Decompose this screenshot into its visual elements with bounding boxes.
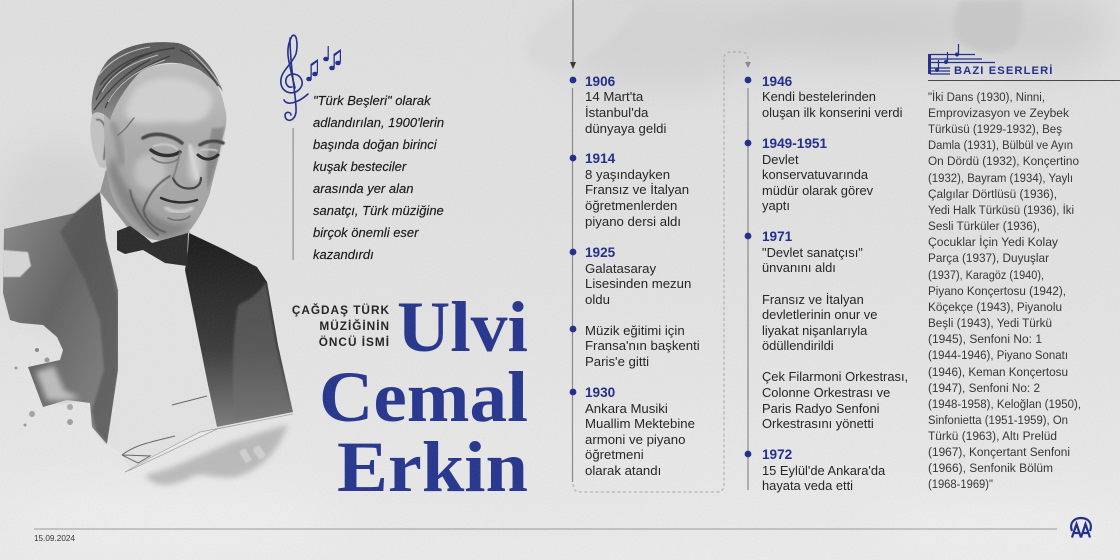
timeline connectors [570, 0, 751, 492]
timeline column 2: müdür olarak görev [762, 183, 874, 198]
timeline column 1: Müzik eğitimi için [585, 323, 685, 338]
timeline column 2: Çek Filarmoni Orkestrası, [762, 369, 908, 384]
timeline column 2: 15 Eylül'de Ankara'da [762, 463, 886, 478]
works list: (1937), Karagöz (1940), [928, 268, 1044, 282]
intro text: başında doğan birinci [313, 137, 438, 152]
intro text: birçok önemli eser [313, 225, 419, 240]
timeline column 1: öğretmeni [585, 447, 644, 462]
timeline column 1: Ankara Musiki [585, 401, 668, 416]
timeline column 1: dünyaya geldi [585, 121, 666, 136]
timeline column 2: 1949-1951 [762, 136, 827, 151]
title: Ulvi [397, 287, 528, 367]
timeline column 2 [745, 74, 908, 493]
timeline column 2: yaptı [762, 198, 790, 213]
timeline column 2: Fransız ve İtalyan [762, 292, 864, 307]
subtitle [292, 303, 390, 349]
timeline column 1: oldu [585, 292, 610, 307]
intro text: "Türk Beşleri" olarak [313, 93, 432, 108]
works list: (1967), Konçertant Senfoni [928, 445, 1070, 459]
right coat [185, 233, 293, 427]
face [104, 64, 226, 240]
timeline column 1: Fransız ve İtalyan [585, 182, 689, 197]
shirt front [100, 192, 217, 468]
works list: (1944-1946), Piyano Sonatı [928, 348, 1068, 362]
portrait: Ulvi Cemal Erkin [3, 42, 293, 485]
icon: music notes [306, 46, 341, 81]
works list: Yedi Halk Türküsü (1936), İki [928, 203, 1074, 217]
timeline column 1: öğretmenlerden [585, 198, 677, 213]
date: 15.09.2024 [34, 534, 75, 543]
works list [928, 80, 1120, 491]
timeline column 2: 1972 [762, 447, 793, 462]
timeline column 2: Orkestrasını yönetti [762, 416, 874, 431]
timeline column 2: 1971 [762, 229, 793, 244]
intro text: adlandırılan, 1900'lerin [313, 115, 444, 130]
timeline column 2: hayata veda etti [762, 478, 853, 493]
works list: (1946), Keman Konçertosu [928, 365, 1068, 379]
timeline column 1: Galatasaray [585, 261, 657, 276]
works list: (1945), Senfoni No: 1 [928, 332, 1042, 346]
subtitle: ÇAĞDAŞ TÜRK [292, 303, 390, 317]
title [319, 287, 528, 507]
timeline column 1: piyano dersi aldı [585, 214, 681, 229]
timeline column 1: armoni ve piyano [585, 432, 685, 447]
works list: Çocuklar İçin Yedi Kolay [928, 235, 1059, 249]
timeline column 2: konservatuvarında [762, 167, 869, 182]
timeline column 2: Devlet [762, 152, 799, 167]
works list: Beşli (1943), Yedi Türkü [928, 316, 1052, 330]
neck [100, 170, 190, 245]
works list: Sinfonietta (1951-1959), On [928, 413, 1068, 427]
footer line [34, 528, 1057, 530]
timeline column 1: 1930 [585, 385, 615, 400]
timeline column 2: liyakat nişanlarıyla [762, 323, 868, 338]
timeline column 2: Paris Radyo Senfoni [762, 401, 880, 416]
subtitle: ÖNCÜ İSMİ [319, 335, 390, 349]
timeline column 2: 1946 [762, 74, 793, 89]
timeline column 1: Lisesinden mezun [585, 276, 691, 291]
intro text: sanatçı, Türk müziğine [313, 203, 444, 218]
works list: (1947), Senfoni No: 2 [928, 381, 1040, 395]
timeline column 1: Muallim Mektebine [585, 416, 695, 431]
works list: Sesli Türküler (1936), [928, 219, 1040, 233]
intro text: kuşak besteciler [313, 159, 407, 174]
works list: (1948-1958), Keloğlan (1950), [928, 397, 1081, 411]
timeline column 1: İstanbul'da [585, 105, 649, 120]
works list: Damla (1931), Bülbül ve Ayın [928, 138, 1073, 152]
timeline column 2: ünvanını aldı [762, 260, 836, 275]
intro text [292, 93, 444, 262]
works list: Piyano Konçertosu (1942), [928, 284, 1066, 298]
works list: (1968-1969)" [928, 477, 993, 491]
works list: Köçekçe (1943), Piyanolu [928, 300, 1062, 314]
intro text: arasında yer alan [313, 181, 413, 196]
logo: AA [1071, 518, 1091, 538]
timeline column 2: Kendi bestelerinden [762, 89, 876, 104]
heading: some works: BAZI ESERLERİ [954, 64, 1053, 77]
works list: On Dördü (1932), Konçertino [928, 154, 1079, 168]
timeline column 1: 1906 [585, 74, 616, 89]
timeline column 1: 8 yaşındayken [585, 167, 670, 182]
timeline column 1: olarak atandı [585, 463, 661, 478]
works list: Parça (1937), Duyuşlar [928, 251, 1049, 265]
timeline column 2: devletlerinin onur ve [762, 307, 877, 322]
timeline column 1: Paris'e gitti [585, 354, 649, 369]
left coat [3, 192, 118, 444]
icon: treble clef [281, 35, 308, 120]
open score [122, 396, 293, 485]
timeline column 1: 14 Mart'ta [585, 89, 644, 104]
works list: "İki Dans (1930), Ninni, [928, 90, 1045, 104]
timeline column 1: Fransa'nın başkenti [585, 338, 700, 353]
icon: music staff [928, 44, 995, 74]
ear [90, 112, 110, 168]
intro text: kazandırdı [313, 247, 374, 262]
timeline column 1: 1925 [585, 245, 616, 260]
title: Erkin [337, 427, 528, 507]
bow tie [117, 226, 188, 266]
timeline column 1: 1914 [585, 151, 616, 166]
forehead highlight [125, 77, 212, 123]
works list: Türküsü (1929-1932), Beş [928, 122, 1062, 136]
timeline column 1 [570, 74, 700, 478]
timeline column 2: Colonne Orkestrası ve [762, 385, 890, 400]
facial features [118, 118, 223, 235]
timeline column 2: oluşan ilk konserini verdi [762, 105, 902, 120]
title: Cemal [319, 357, 528, 437]
cheek highlights and shadows [108, 118, 225, 238]
timeline column 2: ödüllendirildi [762, 338, 834, 353]
works list: Çalgılar Dörtlüsü (1936), [928, 187, 1057, 201]
works list: Emprovizasyon ve Zeybek [928, 106, 1070, 120]
works list: (1966), Senfonik Bölüm [928, 461, 1053, 475]
subtitle: MÜZİĞİNİN [319, 319, 390, 333]
works list: (1932), Bayram (1934), Yaylı [928, 171, 1073, 185]
hair [92, 42, 223, 120]
works list: Türkü (1963), Altı Prelüd [928, 429, 1057, 443]
timeline column 2: "Devlet sanatçısı" [762, 245, 863, 260]
